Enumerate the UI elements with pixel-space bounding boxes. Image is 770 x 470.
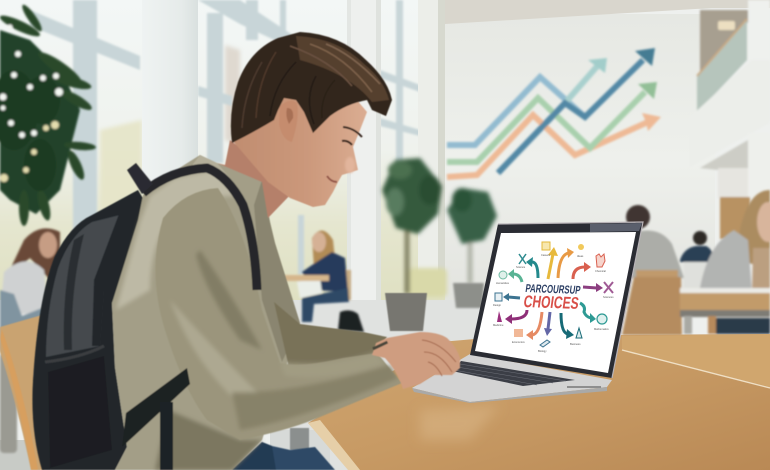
ceiling bbox=[445, 0, 770, 24]
wall mural: rising arrows bbox=[447, 48, 661, 177]
table leg bbox=[290, 428, 309, 450]
reflections on the table bbox=[420, 405, 500, 440]
nose highlight bbox=[345, 157, 355, 173]
hair strands bbox=[242, 44, 380, 128]
near arm sleeve bbox=[155, 188, 402, 440]
far table bbox=[680, 288, 770, 334]
screen micro labels: Business bbox=[570, 342, 581, 346]
laptop lid bbox=[470, 222, 643, 378]
wall bbox=[445, 14, 715, 310]
plant one bbox=[382, 158, 442, 294]
backpack shoulder strap bbox=[143, 168, 257, 290]
laptop screen with Parcoursup diagram bbox=[475, 232, 636, 373]
plant: left foliage bbox=[0, 3, 96, 226]
plants and pots in the centre bbox=[382, 158, 497, 331]
screen micro labels: Medicine bbox=[493, 323, 504, 327]
dark blue arrow bbox=[498, 48, 655, 173]
keyboard bbox=[452, 361, 575, 386]
wooden chair back bbox=[622, 270, 682, 335]
woman at right bbox=[700, 190, 770, 334]
student bbox=[32, 32, 402, 470]
window frames bbox=[30, 0, 420, 275]
distant student bbox=[680, 231, 714, 288]
woman at left bbox=[0, 228, 60, 453]
laptop ports bbox=[567, 386, 601, 388]
screen arrows bbox=[503, 247, 603, 340]
laptop bbox=[412, 222, 643, 403]
woman at centre bbox=[283, 230, 364, 332]
backpack bbox=[32, 190, 150, 470]
laptop base bbox=[412, 354, 612, 402]
plant two bbox=[447, 188, 497, 284]
seated student in grey hoodie bbox=[622, 205, 684, 278]
sweater torso bbox=[112, 155, 300, 470]
ear bbox=[279, 101, 298, 142]
head bbox=[232, 80, 367, 207]
screen icons bbox=[495, 242, 613, 347]
columns bbox=[142, 0, 198, 185]
far arm sleeve bbox=[274, 302, 387, 372]
shaded torso underside bbox=[155, 410, 262, 470]
collar bbox=[190, 155, 230, 178]
screen micro labels: Economics bbox=[512, 340, 525, 344]
backpack handle loop bbox=[127, 163, 153, 194]
screen micro labels: Design bbox=[493, 303, 502, 307]
table bbox=[308, 334, 770, 470]
jeans bbox=[232, 442, 335, 470]
windows bbox=[0, 0, 445, 300]
floor bbox=[270, 300, 620, 470]
pot two bbox=[453, 283, 484, 308]
sleeve folds bbox=[170, 250, 398, 430]
screen micro labels: Chemical bbox=[595, 269, 606, 273]
eyebrow, eye, smile bbox=[327, 127, 362, 182]
screen micro labels: Careers bbox=[541, 253, 551, 257]
green arrow bbox=[447, 82, 657, 162]
neck bbox=[217, 140, 295, 218]
chest bbox=[254, 180, 300, 362]
screen micro labels: Humanities bbox=[496, 281, 510, 285]
green bench bbox=[407, 268, 447, 297]
screen micro labels: Sciences bbox=[603, 295, 614, 299]
orange arrow bbox=[447, 113, 661, 177]
light blue arrow bbox=[447, 77, 585, 145]
hair bbox=[231, 32, 392, 143]
background people bbox=[0, 190, 770, 453]
screen micro labels: Ideas bbox=[577, 254, 584, 258]
left wooden chair bbox=[0, 315, 44, 470]
pot one bbox=[385, 293, 427, 331]
screen micro labels: Science bbox=[516, 265, 526, 269]
screen micro labels: Biology bbox=[538, 349, 547, 353]
right balcony and doorway bbox=[690, 0, 770, 239]
backpack lower strap bbox=[122, 368, 190, 447]
lit shoulder bbox=[116, 170, 236, 310]
screen micro labels: Mathematics bbox=[594, 327, 609, 331]
screen micro labels bbox=[493, 253, 614, 353]
bokeh highlights bbox=[0, 24, 63, 138]
teal arrow bbox=[565, 58, 607, 103]
laptop screen with Parcoursup diagram: CHOICES bbox=[522, 292, 580, 313]
hand on the laptop bbox=[372, 332, 460, 389]
screen title: PARCOURSUP bbox=[525, 283, 581, 297]
